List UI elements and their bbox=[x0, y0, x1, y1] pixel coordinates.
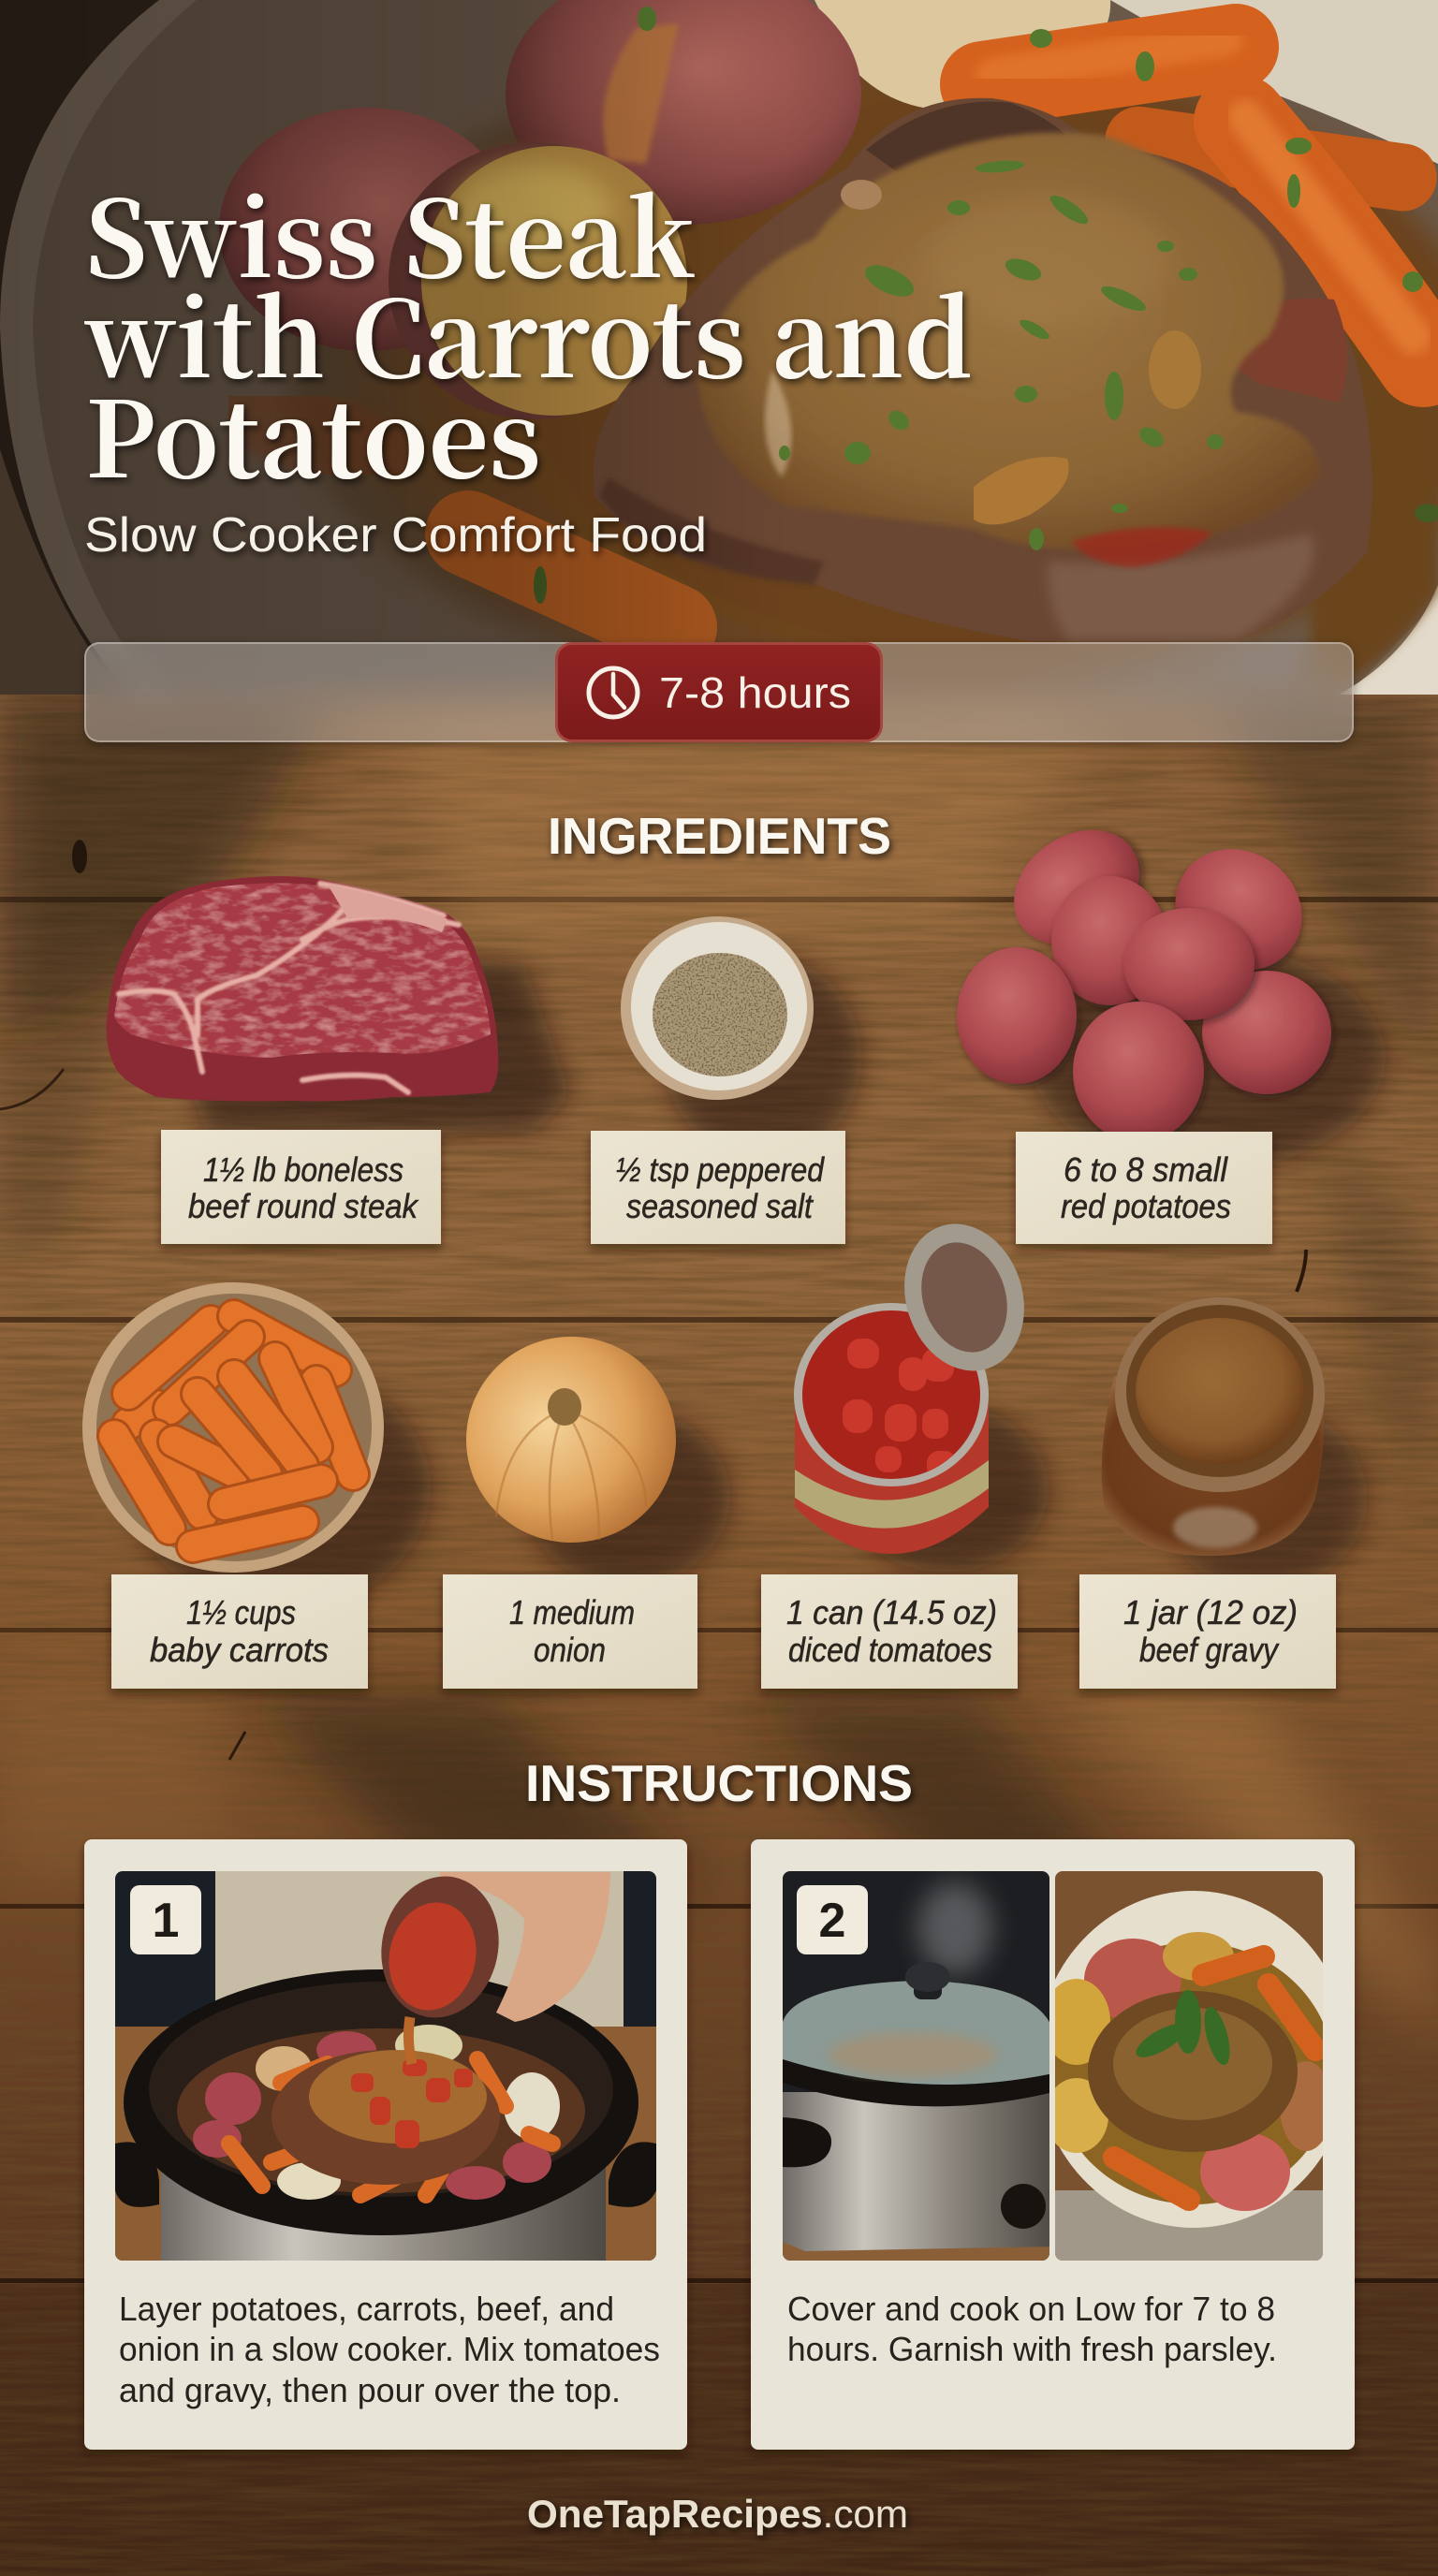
note: carrots: 1½ cups bbox=[186, 1593, 296, 1632]
note: beef: 1½ lb boneless bbox=[203, 1150, 404, 1189]
step 2 number badge: 2 bbox=[819, 1894, 845, 1948]
note: salt: ½ tsp peppered bbox=[616, 1150, 825, 1189]
note: potatoes: 6 to 8 small bbox=[1064, 1150, 1228, 1189]
cook time pill bbox=[555, 642, 883, 742]
note: onion bbox=[443, 1574, 697, 1689]
title: Potatoes bbox=[85, 358, 541, 508]
step 1 text: onion in a slow cooker. Mix tomatoes bbox=[119, 2330, 660, 2368]
title: Swiss Steak bbox=[85, 157, 695, 308]
ingredient: onion bbox=[466, 1337, 730, 1587]
cook time label and clock icon bbox=[586, 666, 851, 719]
cream plate top right bbox=[1110, 0, 1438, 164]
note: potatoes: red potatoes bbox=[1061, 1187, 1231, 1225]
step 1 text: Layer potatoes, carrots, beef, and bbox=[119, 2290, 614, 2328]
cream plate rim bottom right bbox=[1339, 585, 1438, 695]
ingredient: seasoned salt bowl bbox=[621, 916, 861, 1161]
note: tomatoes: diced tomatoes bbox=[788, 1631, 992, 1669]
step 1 text bbox=[119, 2290, 660, 2409]
title: with Carrots and bbox=[84, 257, 973, 408]
note: gravy bbox=[1079, 1574, 1336, 1689]
step 1 photo: pouring into slow cooker bbox=[115, 1866, 656, 2261]
cook time label and clock icon: 7-8 hours bbox=[659, 668, 851, 717]
instructions heading: INSTRUCTIONS bbox=[525, 1754, 913, 1812]
left whole potato bbox=[219, 108, 481, 350]
step 2 photo: plated dish bbox=[1036, 1871, 1351, 2261]
light and shadow on the wood bbox=[0, 693, 1438, 2576]
panel: step 2 card bbox=[751, 1839, 1355, 2450]
top carrot bbox=[983, 39, 1236, 84]
ingredient: jar of beef gravy bbox=[1102, 1297, 1367, 1591]
lower-left carrot bbox=[468, 534, 674, 627]
cut potato bbox=[389, 142, 687, 419]
parsley flecks bbox=[534, 7, 1438, 604]
note: onion: onion bbox=[534, 1631, 606, 1669]
gravy on the steak bbox=[697, 133, 1320, 567]
note: potatoes bbox=[1016, 1132, 1272, 1244]
note: salt: seasoned salt bbox=[626, 1187, 814, 1225]
wood table background bbox=[0, 693, 1438, 2576]
note: onion: 1 medium bbox=[509, 1593, 635, 1632]
note: beef bbox=[161, 1130, 441, 1244]
note: carrots: baby carrots bbox=[150, 1631, 329, 1669]
note: tomatoes: 1 can (14.5 oz) bbox=[786, 1593, 997, 1632]
step 2 text: Cover and cook on Low for 7 to 8 bbox=[787, 2290, 1275, 2328]
step 1 number badge: 1 bbox=[153, 1894, 179, 1948]
ingredient: baby carrots bowl bbox=[82, 1282, 431, 1610]
tomato stream bbox=[408, 2017, 412, 2064]
top whole potato bbox=[506, 0, 861, 225]
left dark overlay bbox=[0, 0, 1438, 695]
step 2 number badge bbox=[797, 1885, 868, 1954]
note: salt bbox=[591, 1131, 845, 1244]
ingredient: canned diced tomatoes bbox=[794, 1208, 1049, 1573]
top-right pale potato bbox=[814, 0, 1110, 110]
panel: step 1 card bbox=[84, 1839, 687, 2450]
napkin corner bbox=[0, 449, 122, 695]
cook time bar bbox=[84, 642, 1354, 742]
footer brand: OneTapRecipes.com bbox=[527, 2492, 908, 2536]
hero photo: steak plate bbox=[0, 0, 1438, 702]
note: gravy: 1 jar (12 oz) bbox=[1123, 1593, 1298, 1632]
ingredient: red potatoes bbox=[957, 807, 1386, 1170]
right carrot bbox=[1240, 117, 1423, 360]
tilted can bbox=[369, 1866, 511, 2028]
step 2 text bbox=[787, 2290, 1277, 2368]
step 2 photo: covered slow cooker bbox=[783, 1871, 1053, 2261]
steak base bbox=[593, 98, 1372, 641]
note: gravy: beef gravy bbox=[1139, 1631, 1280, 1669]
title bbox=[84, 157, 973, 508]
note: beef: beef round steak bbox=[188, 1187, 419, 1225]
step 2 text: hours. Garnish with fresh parsley. bbox=[787, 2330, 1277, 2368]
step 1 text: and gravy, then pour over the top. bbox=[119, 2371, 621, 2409]
note: carrots bbox=[111, 1574, 368, 1689]
step 1 number badge bbox=[130, 1885, 201, 1954]
dinner plate bbox=[0, 0, 1438, 695]
ingredient: beef round steak bbox=[107, 876, 571, 1133]
subtitle: Slow Cooker Comfort Food bbox=[84, 508, 707, 563]
ingredients heading: INGREDIENTS bbox=[548, 807, 891, 865]
behind carrot bbox=[1138, 140, 1403, 177]
gravy pool bbox=[290, 47, 1438, 702]
note: tomatoes bbox=[761, 1574, 1018, 1689]
hand bbox=[440, 1872, 610, 2022]
